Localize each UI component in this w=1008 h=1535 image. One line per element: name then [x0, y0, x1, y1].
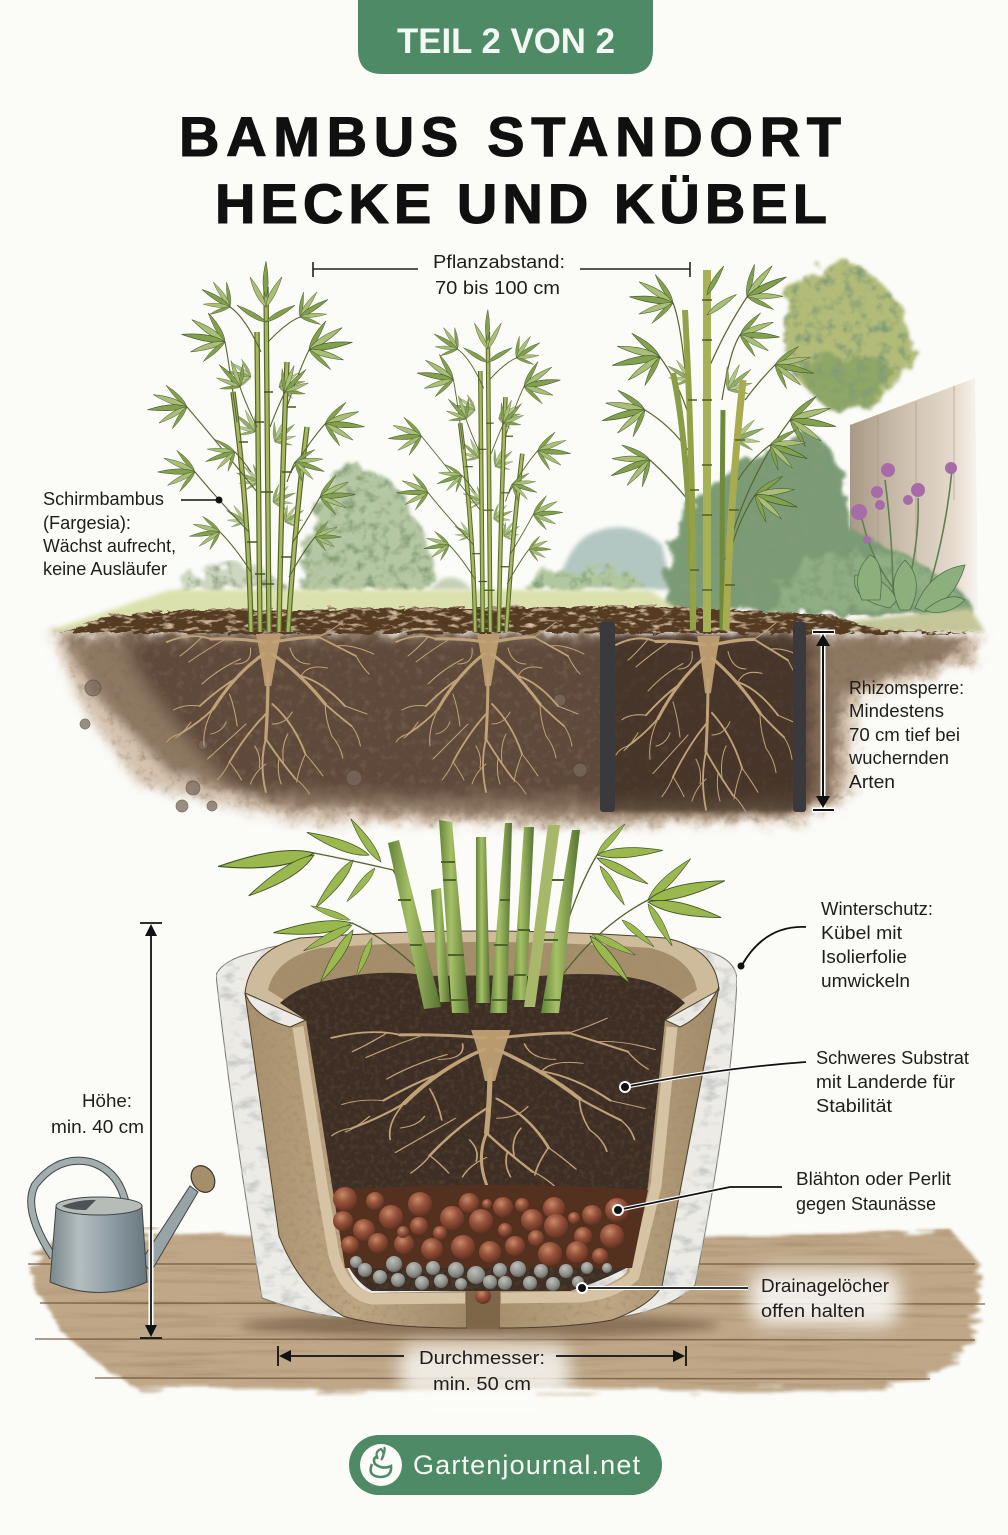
label: Rhizomsperre: Rhizomsperre: [849, 677, 964, 698]
footer logo pill [349, 1435, 662, 1495]
label: Schirmbambus: (Fargesia): [43, 512, 131, 533]
label: Blähton [613, 1168, 951, 1215]
title [179, 105, 841, 235]
garden scene: background [45, 262, 985, 632]
label: Rhizomsperre [812, 632, 964, 810]
roots: plant 2 [396, 622, 584, 794]
potting soil [280, 973, 685, 1291]
dimension: Höhe: min. 40 cm [51, 1116, 144, 1137]
label: Schirmbambus [43, 488, 222, 579]
label: Pflanzabstand: Pflanzabstand: [433, 251, 565, 272]
pot bamboo twigs and leaves behind culms [217, 817, 726, 1000]
watering can [31, 1161, 220, 1292]
planter outer wall [245, 987, 719, 1328]
drainage hole [467, 1291, 499, 1329]
planter back inner wall [245, 931, 719, 1020]
label: Pflanzabstand: 70 bis 100 cm [435, 277, 560, 298]
label: Schirmbambus: keine Ausläufer [43, 558, 167, 579]
label: Winterschutz: Winterschutz: [821, 898, 933, 919]
planter cross section [216, 817, 737, 1337]
badge: part 2 of 2 [358, 0, 653, 74]
title: BAMBUS STANDORT [179, 105, 841, 168]
label: Winterschutz [738, 898, 933, 991]
label: Drainagelöcher: Drainagelöcher [761, 1275, 889, 1296]
label: Rhizomsperre: Mindestens [849, 700, 944, 721]
dimension: Durchmesser: Durchmesser: [419, 1347, 545, 1368]
stones in soil [80, 680, 587, 812]
label: Schirmbambus: Schirmbambus [43, 488, 164, 509]
shadow under planter [240, 1313, 720, 1337]
label: Blähton: gegen Staunässe [796, 1193, 936, 1214]
bamboo plant 2 [387, 309, 572, 632]
soil cross section [52, 636, 983, 826]
expanded clay [333, 1185, 648, 1268]
dimension: Höhe [51, 923, 162, 1338]
pot roots [332, 1018, 655, 1187]
mulch layer [60, 606, 985, 634]
flowers [851, 462, 965, 612]
bamboo plant 1 [146, 261, 366, 632]
label: Drainagelöcher: offen halten [761, 1300, 865, 1321]
pot bamboo culms [388, 820, 580, 1013]
label: Rhizomsperre: 70 cm tief bei [849, 724, 960, 745]
root barrier right [793, 622, 806, 812]
label: Rhizomsperre: wuchernden [848, 747, 949, 768]
darker zone inside the root barrier [612, 636, 796, 812]
grey drainage gravel [350, 1256, 612, 1291]
label: Schweres Substrat [620, 1047, 969, 1116]
label: Schweres Substrat: mit Landerde für [816, 1071, 955, 1092]
bamboo plant 3 [598, 252, 836, 632]
wooden deck [28, 1235, 985, 1390]
roots: plant 1 [167, 622, 374, 794]
label: Drainagelöcher [577, 1270, 900, 1326]
label: Blähton: Blähton oder Perlit [796, 1168, 951, 1189]
dimension: Durchmesser [278, 1345, 686, 1397]
label: Winterschutz: Kübel mit [821, 922, 902, 943]
title: HECKE UND KÜBEL [215, 172, 827, 235]
dimension: Höhe: Höhe: [82, 1090, 132, 1111]
insulating fleece wrap [216, 932, 737, 1318]
label: Winterschutz: umwickeln [821, 970, 910, 991]
label: Schweres Substrat: Stabilität [816, 1095, 892, 1116]
root barrier left [600, 622, 615, 812]
label: Schirmbambus: Wächst aufrecht, [43, 535, 176, 556]
footer logo pill: Gartenjournal.net [413, 1450, 640, 1480]
label: Rhizomsperre: Arten [849, 771, 895, 792]
icon: plant logo [360, 1444, 402, 1486]
dimension: Durchmesser: min. 50 cm [433, 1373, 531, 1394]
label: Winterschutz: Isolierfolie [821, 946, 907, 967]
badge: part 2 of 2: TEIL 2 VON 2 [397, 22, 615, 61]
roots: plant 3 [616, 623, 804, 812]
label: Pflanzabstand [313, 251, 690, 298]
planter cut faces [298, 1027, 672, 1299]
label: Schweres Substrat: Schweres Substrat [816, 1047, 969, 1068]
